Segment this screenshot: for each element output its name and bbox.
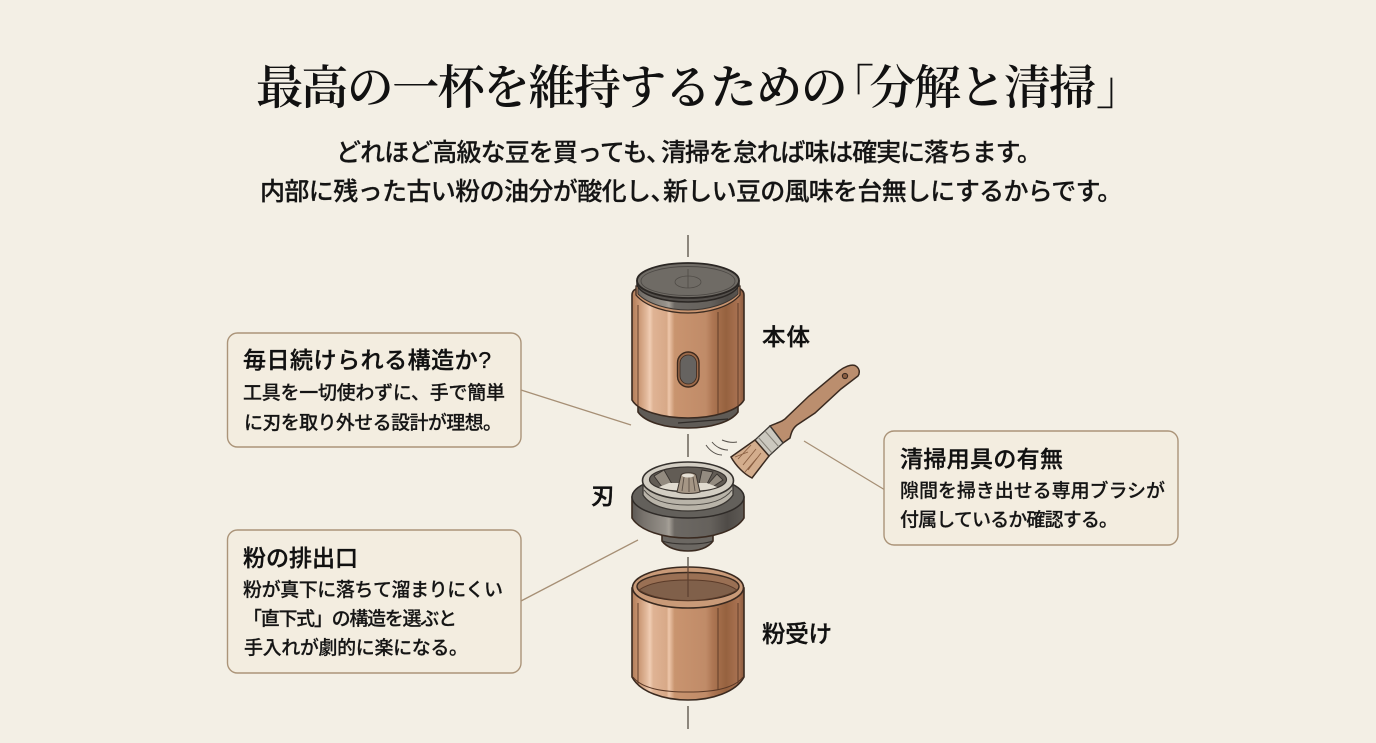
burr vanes (654, 470, 723, 488)
callout: structure: 毎日続けられる構造か? (243, 347, 491, 373)
flange (632, 497, 744, 538)
callout: cleaning tools: 隙間を掃き出せる専用ブラシが (900, 479, 1165, 502)
intro text (260, 139, 1122, 206)
part label: grounds cup: 粉受け (762, 621, 832, 647)
handle (770, 365, 859, 443)
intro text: 清掃を怠れば味は確実に落ちます。 (661, 139, 1041, 167)
callout: cleaning tools (884, 431, 1178, 545)
callout: structure: に刃を取り外せる設計が理想。 (244, 412, 502, 434)
callout: outlet: 粉の排出口 (243, 545, 358, 571)
callout: outlet: 「直下式」の構造を選ぶと (243, 608, 457, 630)
title: 最高の一杯を維持するための「分解と清掃」 (256, 63, 1143, 115)
copper shell (632, 288, 744, 418)
outlet spout (662, 530, 713, 551)
copper lip (636, 286, 740, 313)
exploded axis lines (687, 235, 689, 729)
ferrule (755, 426, 783, 456)
intro text: 新しい豆の風味を台無しにするからです。 (663, 178, 1122, 206)
illustration: grinder body (632, 263, 744, 428)
center cone (677, 473, 700, 494)
lid (637, 281, 739, 302)
callout: structure: 工具を一切使わずに、手で簡単 (243, 382, 505, 404)
illustration: blade unit (632, 462, 744, 551)
callout: outlet (228, 530, 521, 673)
part label: body: 本体 (762, 324, 810, 350)
callout: cleaning tools: 清掃用具の有無 (900, 446, 1063, 472)
bristles (731, 440, 769, 478)
illustration: grounds cup (632, 567, 744, 700)
grey collar (638, 282, 738, 310)
illustration: cleaning brush (706, 365, 859, 478)
callout: cleaning tools: 付属しているか確認する。 (900, 509, 1118, 531)
intro text: どれほど高級な豆を買っても、 (336, 139, 670, 167)
leader lines (521, 390, 885, 601)
lower ring (638, 405, 738, 428)
callout: outlet: 手入れが劇的に楽になる。 (244, 637, 468, 659)
intro text: 内部に残った古い粉の油分が酸化し、 (260, 178, 675, 206)
motion marks (706, 440, 737, 455)
callout: outlet: 粉が真下に落ちて溜まりにくい (243, 579, 503, 601)
callout: structure (228, 333, 521, 447)
indicator window (678, 352, 699, 387)
metal ring (643, 481, 733, 511)
part label: blade: 刃 (591, 483, 614, 509)
